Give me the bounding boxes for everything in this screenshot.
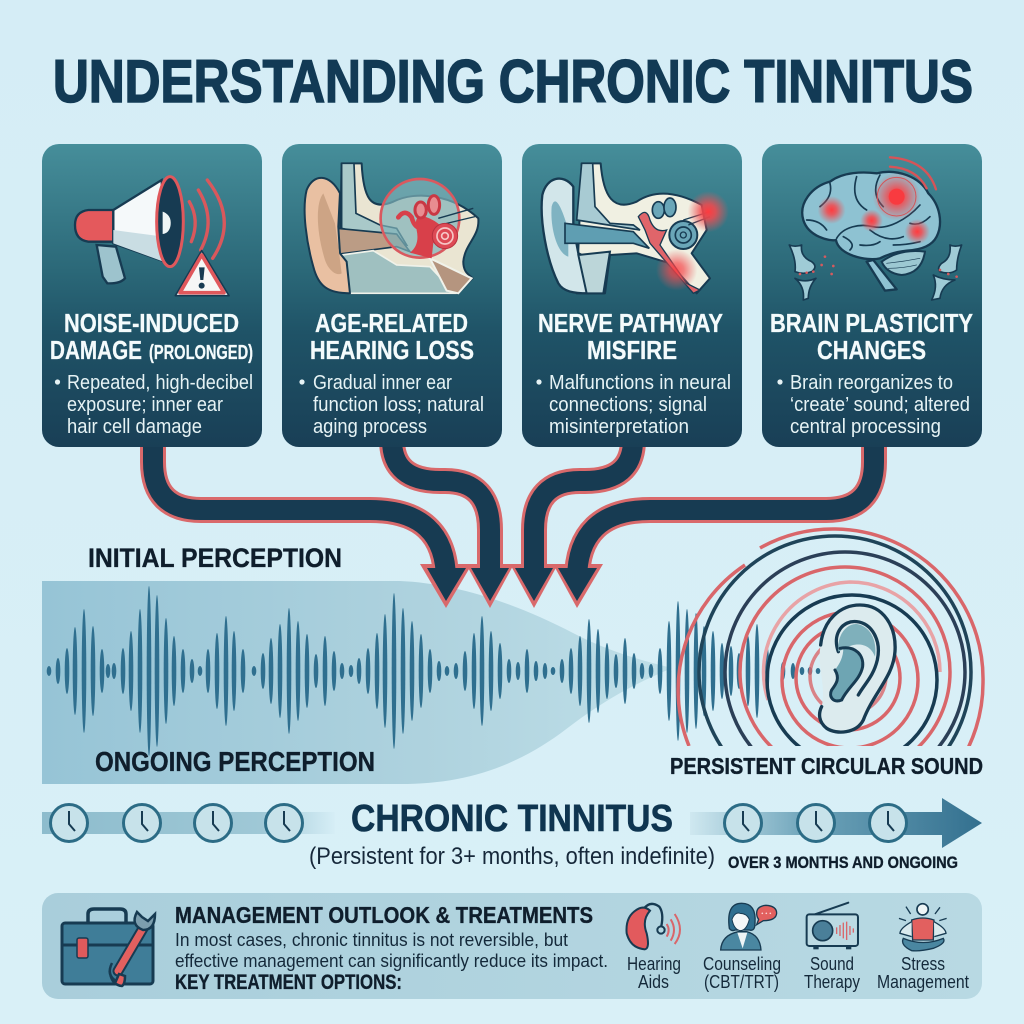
outlook text xyxy=(175,929,608,971)
panel: nerve pathway misfire xyxy=(522,144,742,447)
heading xyxy=(538,308,723,365)
label: sound therapy: Sound xyxy=(810,954,854,974)
heading: HEARING LOSS xyxy=(310,335,474,365)
subheading: KEY TREATMENT OPTIONS: xyxy=(175,971,402,994)
bullet text xyxy=(55,372,253,438)
label: counseling xyxy=(703,954,781,992)
heading: NERVE PATHWAY xyxy=(538,308,723,338)
timeline: left bar with clocks xyxy=(42,804,335,842)
label: counseling: (CBT/TRT) xyxy=(704,972,779,992)
label: sound therapy: Therapy xyxy=(804,972,860,992)
bullet text: connections; signal xyxy=(549,394,707,416)
bullet text: function loss; natural xyxy=(313,394,484,416)
label: stress management: Management xyxy=(877,972,969,992)
icon: megaphone with warning xyxy=(75,177,229,296)
icon: clock xyxy=(798,804,834,842)
label: ongoing perception: ONGOING PERCEPTION xyxy=(95,746,375,777)
icon: clock xyxy=(724,804,762,842)
heading: AGE-RELATED xyxy=(315,308,468,338)
heading: chronic tinnitus: CHRONIC TINNITUS xyxy=(351,798,673,840)
label: over 3 months: OVER 3 MONTHS AND ONGOING xyxy=(728,853,958,872)
icon: brain with active spots and joints xyxy=(789,157,962,300)
bullet text xyxy=(777,372,970,438)
bullet text: ‘create’ sound; altered xyxy=(790,394,970,416)
heading: BRAIN PLASTICITY xyxy=(770,308,973,338)
bullet text: Gradual inner ear xyxy=(313,372,452,394)
icon: counselor with speech bubble xyxy=(721,903,777,950)
icon: clock xyxy=(50,804,88,842)
bullet text: Brain reorganizes to xyxy=(790,372,953,394)
heading: MANAGEMENT OUTLOOK & TREATMENTS xyxy=(175,902,593,928)
flow arrows: four causes converging xyxy=(153,440,874,608)
label: sound therapy xyxy=(804,954,860,992)
chart: sound waveform xyxy=(47,586,820,756)
heading: CHANGES xyxy=(817,335,926,365)
bullet text: Repeated, high-decibel xyxy=(67,372,253,394)
panel: noise-induced damage xyxy=(42,144,262,447)
icon: clock xyxy=(266,804,302,842)
label: persistent circular sound: PERSISTENT CIRCULAR SOUND xyxy=(670,753,983,779)
heading: MISFIRE xyxy=(587,335,677,365)
icon: ear anatomy with cochlea xyxy=(305,163,478,293)
label: hearing aids xyxy=(627,954,681,992)
bullet text xyxy=(536,372,731,438)
label: hearing aids: Aids xyxy=(638,972,669,992)
outlook text: In most cases, chronic tinnitus is not reversible, but xyxy=(175,929,568,950)
label: stress management: Stress xyxy=(901,954,945,974)
heading: DAMAGE xyxy=(50,335,142,365)
heading: (PROLONGED) xyxy=(149,342,253,364)
panel: age-related hearing loss xyxy=(282,144,502,447)
bullet text xyxy=(299,372,484,438)
label: hearing aids: Hearing xyxy=(627,954,681,974)
label: initial perception: INITIAL PERCEPTION xyxy=(88,543,342,573)
bullet text: central processing xyxy=(790,416,941,438)
bullet text: hair cell damage xyxy=(67,416,202,438)
icon: radio xyxy=(807,903,858,949)
timeline: right arrow with clocks xyxy=(690,798,982,848)
heading xyxy=(310,308,474,365)
heading xyxy=(770,308,973,365)
label: stress management xyxy=(877,954,969,992)
bullet text: misinterpretation xyxy=(549,416,689,438)
bullet text: aging process xyxy=(313,416,427,438)
icon: clock xyxy=(194,804,232,842)
icon: clock xyxy=(870,804,906,842)
icon: clock xyxy=(124,804,160,842)
outlook text: effective management can significantly reduce its impact. xyxy=(175,950,608,971)
bullet text: exposure; inner ear xyxy=(67,394,223,416)
subheading: duration: (Persistent for 3+ months, often indefinite) xyxy=(309,843,715,870)
circular sound rings around ear xyxy=(676,527,985,746)
icon: ear anatomy with nerve glow xyxy=(542,163,729,293)
icon: meditating person xyxy=(899,904,947,951)
icon: toolbox with wrench xyxy=(62,909,155,986)
bullet text: Malfunctions in neural xyxy=(549,372,731,394)
panel: management outlook and treatments xyxy=(42,893,982,999)
label: counseling: Counseling xyxy=(703,954,781,974)
heading xyxy=(50,308,253,365)
waveform background area xyxy=(42,581,672,784)
panel: brain plasticity changes xyxy=(762,144,982,447)
icon: ear xyxy=(820,605,895,732)
icon: hearing aid xyxy=(626,904,680,949)
heading: NOISE-INDUCED xyxy=(64,308,239,338)
